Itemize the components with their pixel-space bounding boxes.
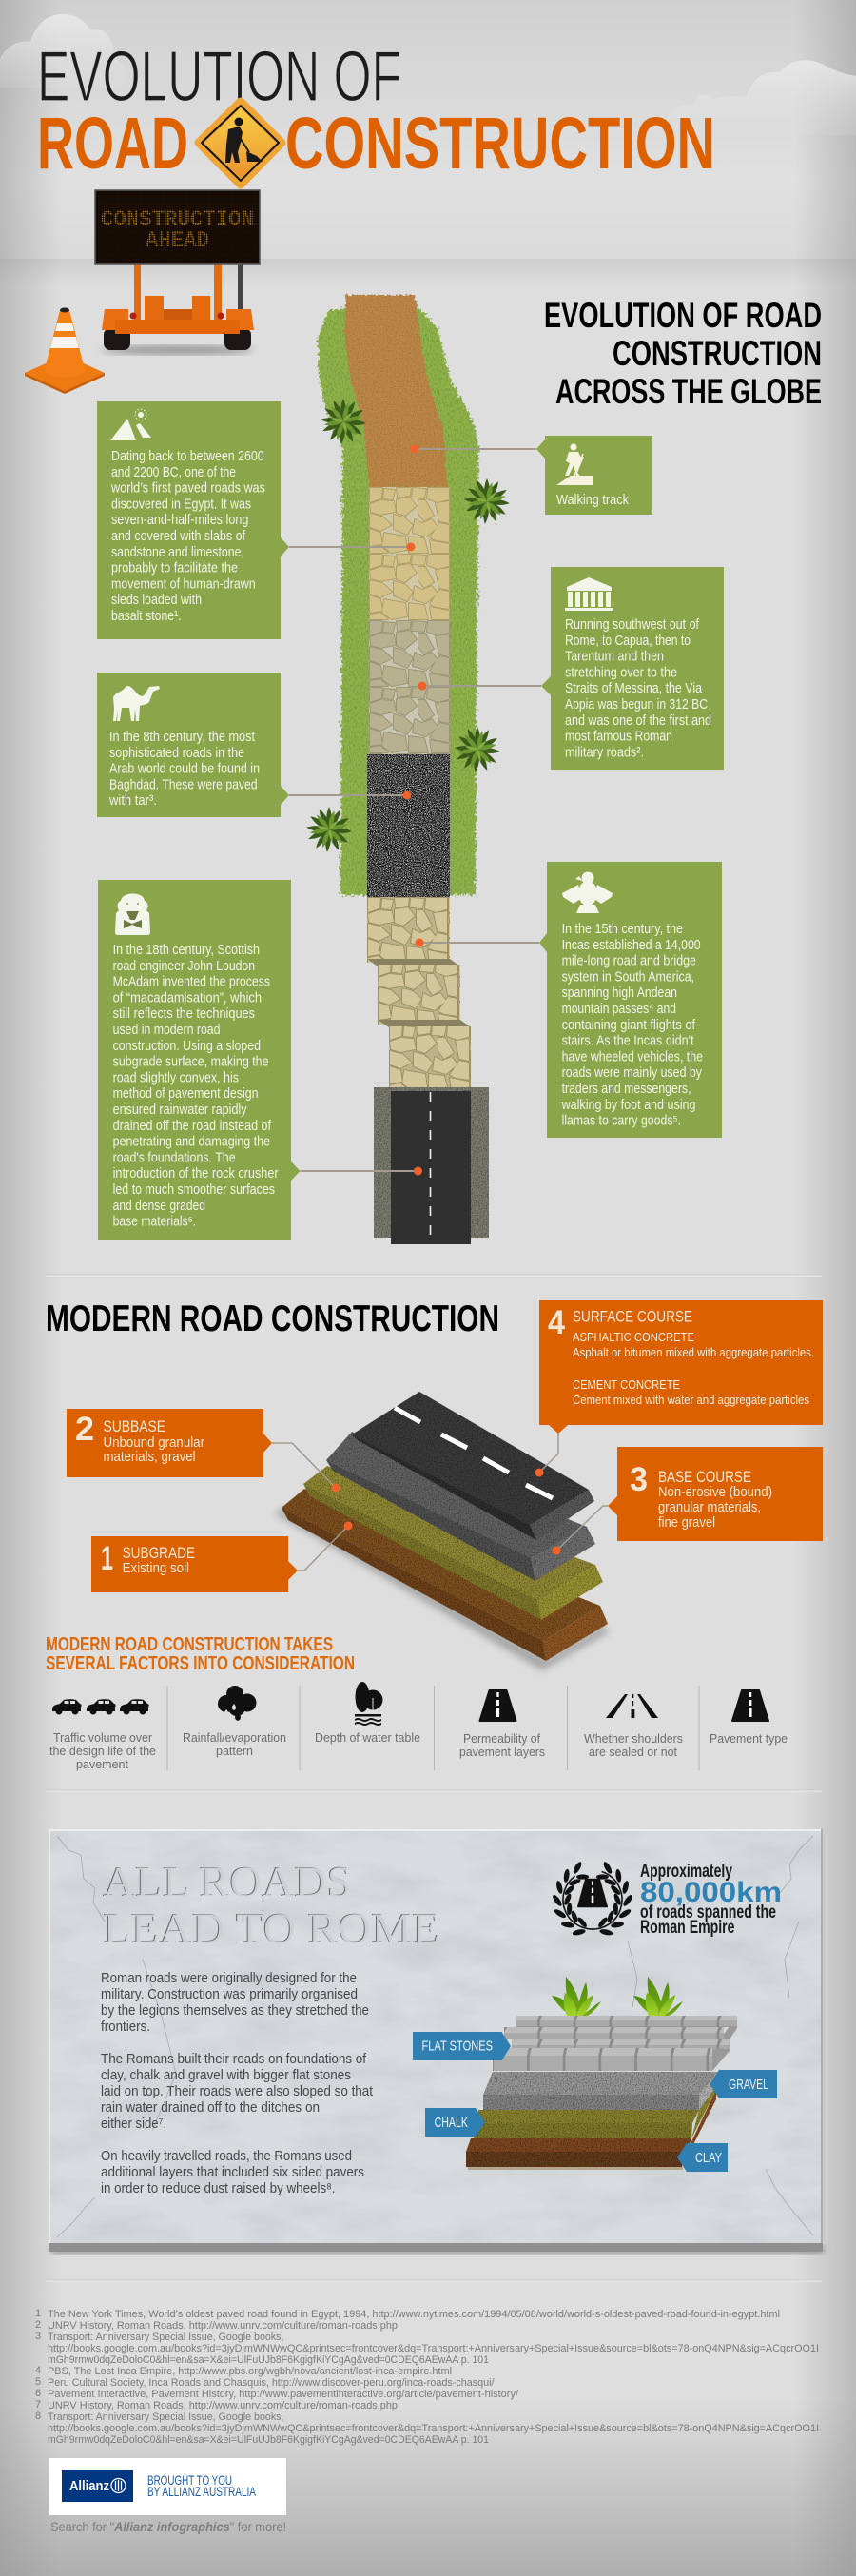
- connector: subbase: [272, 1443, 340, 1492]
- text: inca: traders and messengers,: [562, 1081, 691, 1097]
- factor: traffic volume: [49, 1699, 156, 1771]
- text: mcadam: [113, 942, 279, 1230]
- references: 1: [35, 2308, 41, 2319]
- stat: 80,000km: Roman Empire: [640, 1918, 734, 1938]
- icon: temple: [565, 577, 613, 611]
- body text: frontiers.: [101, 2019, 150, 2035]
- allianz logo box: BY ALLIANZ AUSTRALIA: [147, 2484, 256, 2499]
- text: baghdad: [108, 729, 260, 809]
- icon: hiker: [556, 443, 593, 485]
- text: mcadam: subgrade surface, making the: [113, 1054, 268, 1070]
- factor: water table: Depth of water table: [315, 1730, 420, 1745]
- factors heading: MODERN ROAD CONSTRUCTION TAKES: [46, 1633, 333, 1655]
- factors row: [49, 1682, 788, 1771]
- factors heading: SEVERAL FACTORS INTO CONSIDERATION: [46, 1652, 355, 1674]
- icon: road work sign: [199, 102, 282, 185]
- heading: LEAD TO ROME: [103, 1904, 439, 1952]
- gravel layer: [483, 2069, 720, 2110]
- panel: mcadam: [98, 880, 301, 1240]
- connector: egypt: [289, 542, 415, 552]
- icon: traffic cone: [25, 308, 105, 394]
- layer: subgrade: [282, 1489, 608, 1661]
- text: egypt: sandstone and limestone,: [111, 544, 244, 560]
- body text: laid on top. Their roads were also sloped so that: [101, 2083, 374, 2099]
- panel: subbase: [67, 1409, 272, 1477]
- references: 2: [35, 2319, 41, 2331]
- number 4: 4: [548, 1304, 565, 1341]
- panel: surface course: Asphalt or bitumen mixed with aggregate particles.: [573, 1346, 814, 1359]
- text: baghdad: with tar³.: [108, 792, 157, 809]
- references: http://books.google.com.au/books?id=3jyDjmWNWwQC&printsec=frontcover&dq=Transport:+Anniversary+Special+Issue&source=bl&ots=78-onQ4NPN&sig=ACqcrOO1I: [48, 2423, 819, 2434]
- icon: pyramid: [110, 409, 151, 440]
- text: inca: spanning high Andean: [562, 985, 677, 1001]
- panel: surface course: [539, 1300, 823, 1434]
- text: inca: mile-long road and bridge: [562, 953, 696, 969]
- text: baghdad: In the 8th century, the most: [109, 729, 256, 745]
- text: egypt: and 2200 BC, one of the: [111, 464, 236, 480]
- connector: walking track: [411, 445, 536, 453]
- clouds: [0, 14, 856, 135]
- roman road cross-section: [466, 1977, 737, 2170]
- panel: surface course: SURFACE COURSE: [573, 1307, 692, 1326]
- panel: all roads lead to rome: [49, 1829, 824, 2254]
- label: flat stones: [413, 2032, 511, 2060]
- tar section: [367, 754, 450, 897]
- references: 8: [35, 2410, 41, 2422]
- text: egypt: world’s first paved roads was: [110, 480, 265, 497]
- icon: laurel wreath: [551, 1860, 634, 1940]
- panel: subbase: SUBBASE: [103, 1417, 165, 1435]
- text: mcadam: of “macadamisation”, which: [113, 989, 262, 1005]
- text: mcadam: used in modern road: [113, 1022, 221, 1038]
- connector: baghdad: [289, 791, 411, 799]
- text: inca: containing giant flights of: [562, 1017, 696, 1033]
- number 2: 2: [75, 1411, 94, 1448]
- label: gravel: GRAVEL: [729, 2077, 768, 2093]
- references: 7: [35, 2399, 41, 2410]
- connector: via appia: [418, 681, 541, 691]
- text: mcadam: base materials⁶.: [113, 1214, 196, 1230]
- references: 6: [35, 2388, 41, 2399]
- modern road heading: MODERN ROAD CONSTRUCTION: [46, 1298, 499, 1339]
- text: egypt: [110, 448, 265, 624]
- text: via appia: [565, 616, 711, 760]
- panel: surface course: Cement mixed with water and aggregate particles: [573, 1394, 809, 1407]
- text: mcadam: road engineer John Loudon: [113, 958, 255, 974]
- text: mcadam: construction. Using a sloped: [113, 1038, 261, 1054]
- panel: subbase: materials, gravel: [103, 1449, 196, 1465]
- panel: subgrade: Existing soil: [123, 1560, 189, 1576]
- layer: surface course: [352, 1392, 594, 1540]
- factor: permeability: Permeability of: [463, 1731, 540, 1746]
- panel: via appia: [541, 567, 724, 770]
- plants: [552, 1977, 683, 2016]
- panel: subbase: Unbound granular: [103, 1434, 204, 1451]
- text: mcadam: McAdam invented the process: [113, 974, 270, 990]
- references: Peru Cultural Society, Inca Roads and Chasquis, http://www.discover-peru.org/inca-roads-chasqui/: [48, 2377, 495, 2389]
- text: via appia: stretching over to the: [565, 664, 677, 680]
- panel: base course: Non-erosive (bound): [658, 1484, 772, 1500]
- text: inca: llamas to carry goods⁵.: [562, 1113, 681, 1129]
- text: mcadam: road slightly convex, his: [113, 1069, 239, 1085]
- text: mcadam: penetrating and damaging the: [113, 1134, 270, 1150]
- stat: 80,000km: [640, 1862, 782, 1938]
- road markings: [395, 1408, 553, 1498]
- panel: surface course: ASPHALTIC CONCRETE: [573, 1331, 694, 1344]
- references: mGh9rmw0dqZeDoloC0&hl=en&sa=X&ei=UlFuUJb8F6KgigfKiYCgAg&ved=0CDEQ6AEwAA p. 101: [48, 2434, 489, 2446]
- allianz logo box: [49, 2458, 286, 2515]
- text: egypt: and covered with slabs of: [111, 528, 246, 544]
- panel: surface course: CEMENT CONCRETE: [573, 1378, 680, 1392]
- connector: base course: [552, 1506, 608, 1554]
- body text: Roman roads were originally designed for the: [101, 1970, 357, 1986]
- text: baghdad: Arab world could be found in: [109, 761, 260, 777]
- text: egypt: sleds loaded with: [111, 592, 202, 608]
- text: via appia: Appia was begun in 312 BC: [565, 696, 708, 712]
- evolution heading: [544, 295, 822, 411]
- text: egypt: basalt stone¹.: [111, 608, 182, 624]
- title line 2: [37, 103, 715, 185]
- body text: [101, 1970, 374, 2196]
- references: [35, 2308, 819, 2446]
- factor: permeability: pavement layers: [459, 1745, 545, 1759]
- panel: base course: granular materials,: [658, 1499, 761, 1515]
- panel: inca: [539, 862, 722, 1138]
- label: clay: CLAY: [695, 2150, 722, 2166]
- road timeline: [306, 295, 510, 1244]
- number 1: 1: [101, 1540, 113, 1577]
- inca stairs: [367, 897, 471, 1091]
- icon: eagle: [562, 871, 613, 913]
- stone slab: [49, 1829, 824, 2254]
- shadow: [276, 1508, 609, 1670]
- heading: ALL ROADS: [103, 1858, 351, 1905]
- factor: traffic volume: the design life of the: [49, 1744, 156, 1758]
- body text: in order to reduce dust raised by wheels⁸.: [101, 2180, 335, 2196]
- panel: walking track: [536, 436, 652, 515]
- references: UNRV History, Roman Roads, http://www.unrv.com/culture/roman-roads.php: [48, 2320, 398, 2332]
- factor: traffic volume: Traffic volume over: [53, 1730, 153, 1745]
- roman stone section: [369, 620, 450, 754]
- body text: by the legions themselves as they stretched the: [101, 2002, 369, 2019]
- references: PBS, The Lost Inca Empire, http://www.pbs.org/wgbh/nova/ancient/lost-inca-empire.html: [48, 2366, 452, 2377]
- factor: shoulders: are sealed or not: [589, 1745, 677, 1759]
- factor: rainfall: [183, 1686, 286, 1758]
- modern road: [374, 1087, 489, 1244]
- text: walking track: Walking track: [556, 492, 629, 508]
- text: mcadam: In the 18th century, Scottish: [113, 942, 260, 958]
- references: http://books.google.com.au/books?id=3jyDjmWNWwQC&printsec=frontcover&dq=Transport:+Anniversary+Special+Issue&source=bl&ots=78-onQ4NPN&sig=ACqcrOO1I: [48, 2343, 819, 2354]
- bushes: [306, 399, 510, 852]
- text: mcadam: drained off the road instead of: [113, 1118, 272, 1134]
- text: egypt: Dating back to between 2600: [111, 448, 264, 464]
- text: via appia: and was one of the first and: [565, 712, 711, 729]
- text: mcadam: introduction of the rock crusher: [113, 1165, 279, 1181]
- text: inca: [561, 921, 703, 1129]
- text: inca: have wheeled vehicles, the: [562, 1048, 703, 1064]
- factor: rainfall: Rainfall/evaporation: [183, 1730, 286, 1745]
- grass: [318, 309, 478, 895]
- connector: inca: [415, 938, 539, 947]
- led message: CONSTRUCTION: [101, 207, 254, 232]
- text: via appia: Rome, to Capua, then to: [565, 633, 691, 649]
- text: mcadam: ensured rainwater rapidly: [113, 1102, 247, 1118]
- references: 5: [35, 2376, 41, 2388]
- panel: base course: fine gravel: [658, 1514, 715, 1531]
- body text: either side⁷.: [101, 2116, 166, 2132]
- text: via appia: Running southwest out of: [565, 616, 700, 633]
- clay layer: [466, 2090, 716, 2167]
- body text: rain water drained off to the ditches on: [101, 2099, 320, 2116]
- label: flat stones: FLAT STONES: [422, 2038, 493, 2055]
- panel: subgrade: [91, 1536, 298, 1592]
- text: mcadam: and dense graded: [113, 1198, 205, 1214]
- connector: subgrade: [298, 1522, 352, 1571]
- panel: base course: BASE COURSE: [658, 1468, 751, 1486]
- title: [37, 36, 715, 185]
- factor: pavement type: [710, 1690, 788, 1746]
- title line 1: EVOLUTION OF: [37, 36, 401, 116]
- references: 3: [35, 2331, 41, 2342]
- text: egypt: movement of human-drawn: [111, 576, 256, 592]
- ground shadow: [468, 2167, 683, 2170]
- connector: mcadam: [301, 1166, 422, 1176]
- led message: AHEAD: [146, 228, 209, 253]
- text: inca: system in South America,: [562, 968, 694, 985]
- panel: base course: [608, 1447, 823, 1541]
- text: via appia: Tarentum and then: [565, 649, 664, 665]
- layer: base course: [326, 1432, 595, 1581]
- text: inca: Incas established a 14,000: [562, 937, 701, 953]
- text: inca: In the 15th century, the: [562, 921, 683, 937]
- stat: 80,000km: 80,000km: [640, 1877, 782, 1908]
- cobblestone section: [369, 487, 450, 620]
- layered road diagram: [276, 1392, 609, 1670]
- text: egypt: probably to facilitate the: [111, 560, 238, 576]
- connector: surface course: [535, 1434, 558, 1476]
- references: Transport: Anniversary Special Issue, Google books,: [48, 2332, 283, 2343]
- text: mcadam: road's foundations. The: [113, 1149, 236, 1165]
- chalk layer: [474, 2079, 720, 2138]
- body text: clay, chalk and gravel with bigger flat stones: [101, 2067, 351, 2083]
- body text: On heavily travelled roads, the Romans used: [101, 2148, 352, 2164]
- text: inca: stairs. As the Incas didn't: [562, 1033, 694, 1049]
- icon: camel: [113, 686, 160, 721]
- stat: 80,000km: of roads spanned the: [640, 1903, 776, 1922]
- factor: pavement type: Pavement type: [710, 1731, 788, 1746]
- flat stones: [493, 2016, 737, 2071]
- construction ahead board: [95, 190, 260, 355]
- search prompt: Search for "Allianz infographics" for more!: [50, 2519, 286, 2534]
- label: chalk: [425, 2108, 485, 2137]
- text: inca: roads were mainly used by: [562, 1064, 702, 1081]
- dirt track: [344, 295, 447, 487]
- text: mcadam: method of pavement design: [113, 1085, 258, 1102]
- title line 2: ROAD: [37, 103, 188, 185]
- number 3: 3: [630, 1461, 648, 1498]
- icon: mcadam portrait: [115, 894, 150, 935]
- label: chalk: CHALK: [435, 2115, 468, 2131]
- factor: shoulders: [584, 1694, 683, 1759]
- text: egypt: seven-and-half-miles long: [111, 512, 248, 528]
- text: baghdad: sophisticated roads in the: [109, 745, 244, 761]
- body text: additional layers that included six sided pavers: [101, 2164, 364, 2180]
- allianz logo box: BROUGHT TO YOU: [147, 2472, 232, 2488]
- text: via appia: most famous Roman: [565, 729, 672, 745]
- panel: subgrade: SUBGRADE: [123, 1544, 195, 1562]
- factors heading: [46, 1633, 355, 1674]
- stat: 80,000km: Approximately: [640, 1862, 732, 1882]
- references: Transport: Anniversary Special Issue, Google books,: [48, 2411, 283, 2423]
- allianz logo box: Allianz: [69, 2478, 109, 2494]
- references: UNRV History, Roman Roads, http://www.unrv.com/culture/roman-roads.php: [48, 2400, 398, 2411]
- panel: egypt: [97, 401, 289, 639]
- factor: water table: [315, 1682, 420, 1745]
- text: mcadam: led to much smoother surfaces: [113, 1181, 275, 1198]
- text: mcadam: still reflects the techniques: [113, 1005, 255, 1022]
- led message: [101, 207, 254, 253]
- references: mGh9rmw0dqZeDoloC0&hl=en&sa=X&ei=UlFuUJb8F6KgigfKiYCgAg&ved=0CDEQ6AEwAA p. 101: [48, 2354, 489, 2366]
- text: via appia: military roads².: [565, 744, 644, 760]
- text: via appia: Straits of Messina, the Via: [565, 680, 703, 696]
- panel: baghdad: [97, 673, 289, 817]
- text: inca: walking by foot and using: [561, 1097, 696, 1113]
- label: gravel: [710, 2070, 777, 2098]
- references: Pavement Interactive, Pavement History, http://www.pavementinteractive.org/article/pavement-history/: [48, 2389, 519, 2400]
- heading: [103, 1858, 439, 1952]
- body text: The Romans built their roads on foundations of: [101, 2051, 367, 2067]
- factor: traffic volume: pavement: [76, 1757, 128, 1771]
- text: baghdad: Baghdad. These were paved: [109, 776, 257, 792]
- factor: rainfall: pattern: [216, 1744, 253, 1758]
- factor: shoulders: Whether shoulders: [584, 1731, 683, 1746]
- layer: subbase: [303, 1466, 603, 1620]
- body text: military. Construction was primarily organised: [101, 1986, 358, 2002]
- text: inca: mountain passes⁴ and: [562, 1001, 676, 1017]
- factor: permeability: [459, 1690, 545, 1759]
- references: The New York Times, World’s oldest paved road found in Egypt, 1994, http://www.nytimes.com/1994/05/08/world/world-s-oldest-paved-road-found-in-egypt.html: [48, 2309, 780, 2320]
- references: 4: [35, 2365, 41, 2376]
- label: clay: [677, 2143, 728, 2172]
- text: egypt: discovered in Egypt. It was: [111, 496, 251, 512]
